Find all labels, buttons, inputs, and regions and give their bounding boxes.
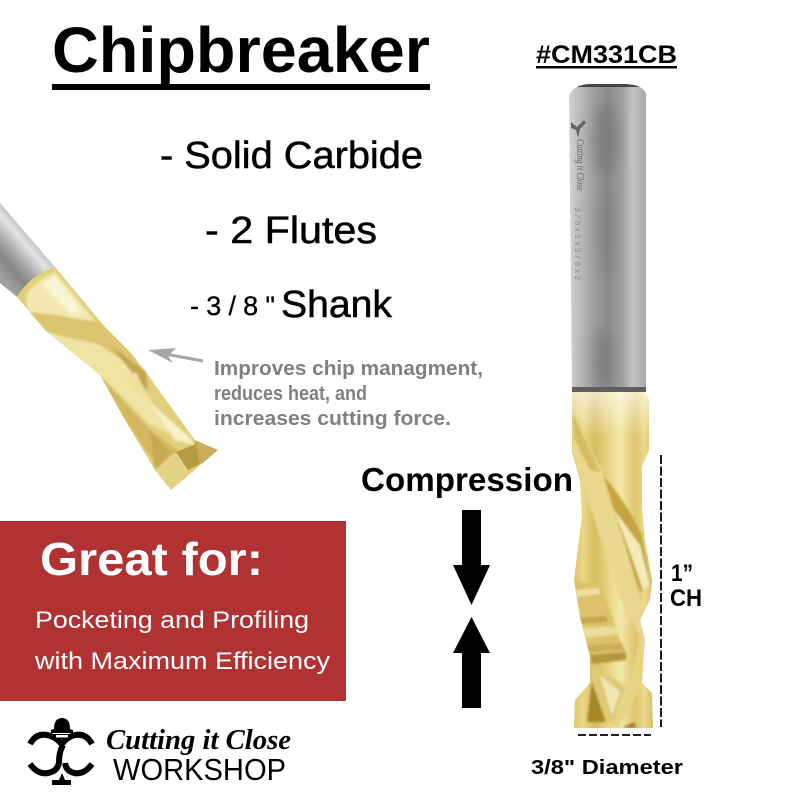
title: Chipbreaker: [52, 14, 430, 86]
panel text: [34, 607, 330, 675]
gold cutting section of angled bit: [17, 267, 218, 490]
feature: 2 flutes: - 2 Flutes: [205, 210, 377, 252]
shank engraving: Cutting it Close: [574, 139, 586, 191]
part number: #CM331CB: [536, 41, 677, 69]
logo: [30, 718, 291, 787]
upper flute: [603, 475, 651, 592]
panel text: Pocketing and Profiling: [35, 607, 309, 634]
shank engraving: [571, 120, 586, 280]
callout arrow: [148, 348, 203, 363]
cutting height dimension: CH: [670, 585, 702, 612]
callout text: [214, 358, 483, 430]
panel text: with Maximum Efficiency: [34, 648, 330, 675]
compression label: Compression: [361, 461, 573, 498]
logo workshop text: WORKSHOP: [113, 752, 286, 787]
angled chipbreaker bit photo: [0, 203, 218, 490]
lower flute: [591, 664, 627, 722]
diameter dimension: 3/8" Diameter: [531, 757, 683, 779]
chip breaker notches: [574, 582, 627, 657]
feature: shank size: -3/8": [190, 291, 275, 321]
shank: [569, 84, 646, 392]
cutting height dimension: 1”: [671, 560, 693, 587]
logo icon: [30, 718, 92, 785]
shank engraving: 3/8x1x3/8x2: [572, 207, 581, 280]
callout text: increases cutting force.: [214, 408, 451, 430]
cutting height dimension: [661, 455, 702, 727]
callout text: Improves chip managment,: [214, 358, 483, 380]
shank of angled bit: [0, 203, 55, 297]
panel heading: Great for:: [40, 533, 263, 585]
arrow: up: [453, 617, 490, 708]
gold flute section: [572, 392, 653, 728]
panel: great for: [0, 521, 346, 701]
helix lip: [572, 412, 646, 645]
feature: solid carbide: - Solid Carbide: [160, 135, 423, 177]
vertical compression bit photo: [569, 84, 653, 728]
feature: shank size: [190, 284, 393, 326]
arrow: down: [453, 510, 490, 605]
feature: shank size: Shank: [281, 284, 393, 326]
logo script text: Cutting it Close: [106, 724, 291, 756]
callout text: reduces heat, and: [214, 383, 367, 405]
